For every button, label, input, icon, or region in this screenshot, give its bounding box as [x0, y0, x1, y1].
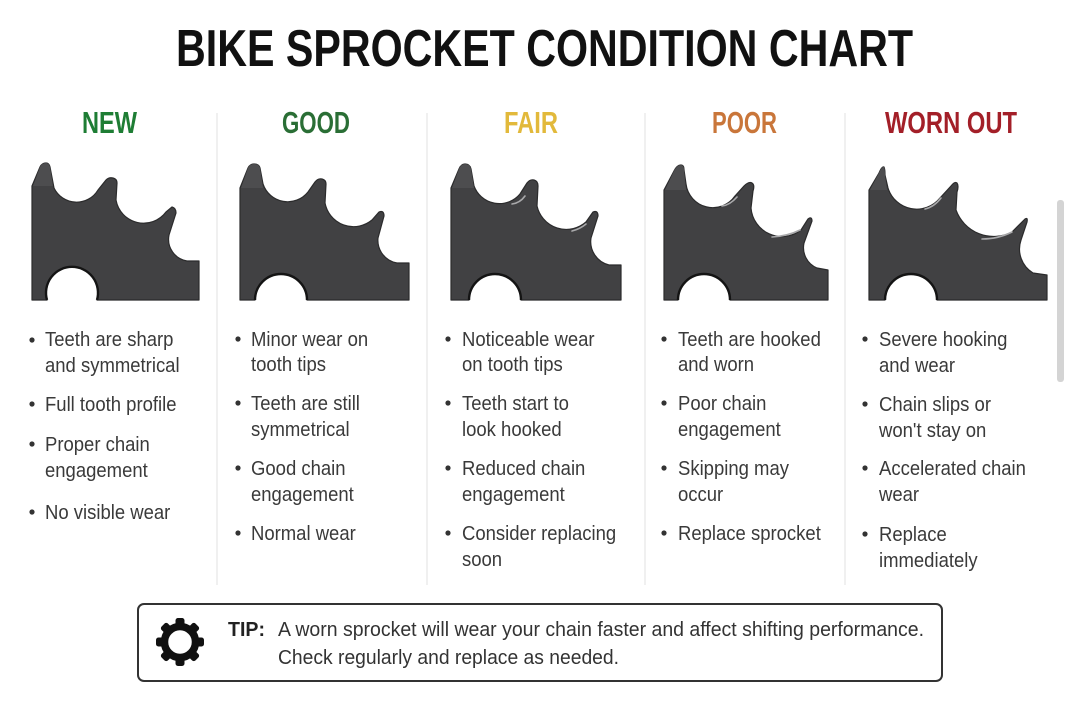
tip text: A worn sprocket will wear your chain faster and affect shifting performance.: [278, 619, 924, 641]
list: fair: on tooth tips: [462, 354, 563, 376]
list: good: Good chain: [251, 458, 346, 480]
list: good: Normal wear: [251, 523, 356, 545]
list: fair: Teeth start to: [462, 393, 569, 415]
heading: new: NEW: [82, 105, 138, 140]
list: good: symmetrical: [251, 419, 350, 441]
list: poor: and worn: [678, 354, 754, 376]
panel: good: [235, 105, 409, 545]
list: worn out: Severe hooking: [879, 329, 1007, 351]
heading: poor: POOR: [712, 105, 777, 140]
panel: worn out: [862, 105, 1047, 572]
list: worn out: [862, 329, 1026, 572]
list: poor: Replace sprocket: [678, 523, 821, 545]
list: fair: Reduced chain: [462, 458, 585, 480]
list: good: Minor wear on: [251, 329, 368, 351]
icon: worn out sprocket: [869, 167, 1047, 300]
tip label: TIP:: [228, 619, 265, 641]
icon: gear: [156, 618, 204, 666]
tip text: Check regularly and replace as needed.: [278, 647, 619, 669]
heading: worn out: WORN OUT: [885, 105, 1017, 140]
panel: new: [29, 105, 199, 524]
list: new: No visible wear: [45, 502, 171, 524]
panel: fair: [445, 105, 621, 571]
list: fair: look hooked: [462, 419, 562, 441]
list: new: Teeth are sharp: [45, 329, 173, 351]
list: good: [235, 329, 368, 545]
list: fair: engagement: [462, 484, 565, 506]
icon: new sprocket: [32, 163, 199, 300]
heading: good: GOOD: [282, 105, 350, 140]
list: poor: [661, 329, 821, 545]
list: worn out: won't stay on: [878, 420, 986, 442]
icon: poor sprocket: [664, 165, 828, 300]
list: new: and symmetrical: [45, 355, 180, 377]
list: worn out: Accelerated chain: [879, 458, 1026, 480]
list: worn out: Chain slips or: [879, 394, 992, 416]
icon: fair sprocket: [451, 164, 621, 300]
list: new: [29, 329, 180, 524]
list: poor: Skipping may: [678, 458, 789, 480]
list: poor: engagement: [678, 419, 781, 441]
title: BIKE SPROCKET CONDITION CHART: [176, 20, 913, 78]
list: worn out: immediately: [879, 550, 978, 572]
list: worn out: and wear: [879, 355, 956, 377]
icon: good sprocket: [240, 164, 409, 300]
tip text: [278, 619, 924, 669]
list: worn out: Replace: [879, 524, 947, 546]
list: fair: Noticeable wear: [462, 329, 595, 351]
panel: poor: [661, 105, 828, 545]
list: fair: Consider replacing: [462, 523, 616, 545]
list: worn out: wear: [878, 484, 920, 506]
list: good: tooth tips: [251, 354, 326, 376]
list: new: Proper chain: [45, 434, 150, 456]
list: poor: Teeth are hooked: [678, 329, 821, 351]
callout: tip: [138, 604, 942, 681]
heading: fair: FAIR: [504, 105, 558, 140]
list: fair: soon: [462, 549, 502, 571]
list: poor: occur: [678, 484, 724, 506]
list: new: Full tooth profile: [45, 394, 177, 416]
list: good: Teeth are still: [251, 393, 360, 415]
list: good: engagement: [251, 484, 354, 506]
list: fair: [445, 329, 616, 571]
list: poor: Poor chain: [678, 393, 766, 415]
list: new: engagement: [45, 460, 148, 482]
